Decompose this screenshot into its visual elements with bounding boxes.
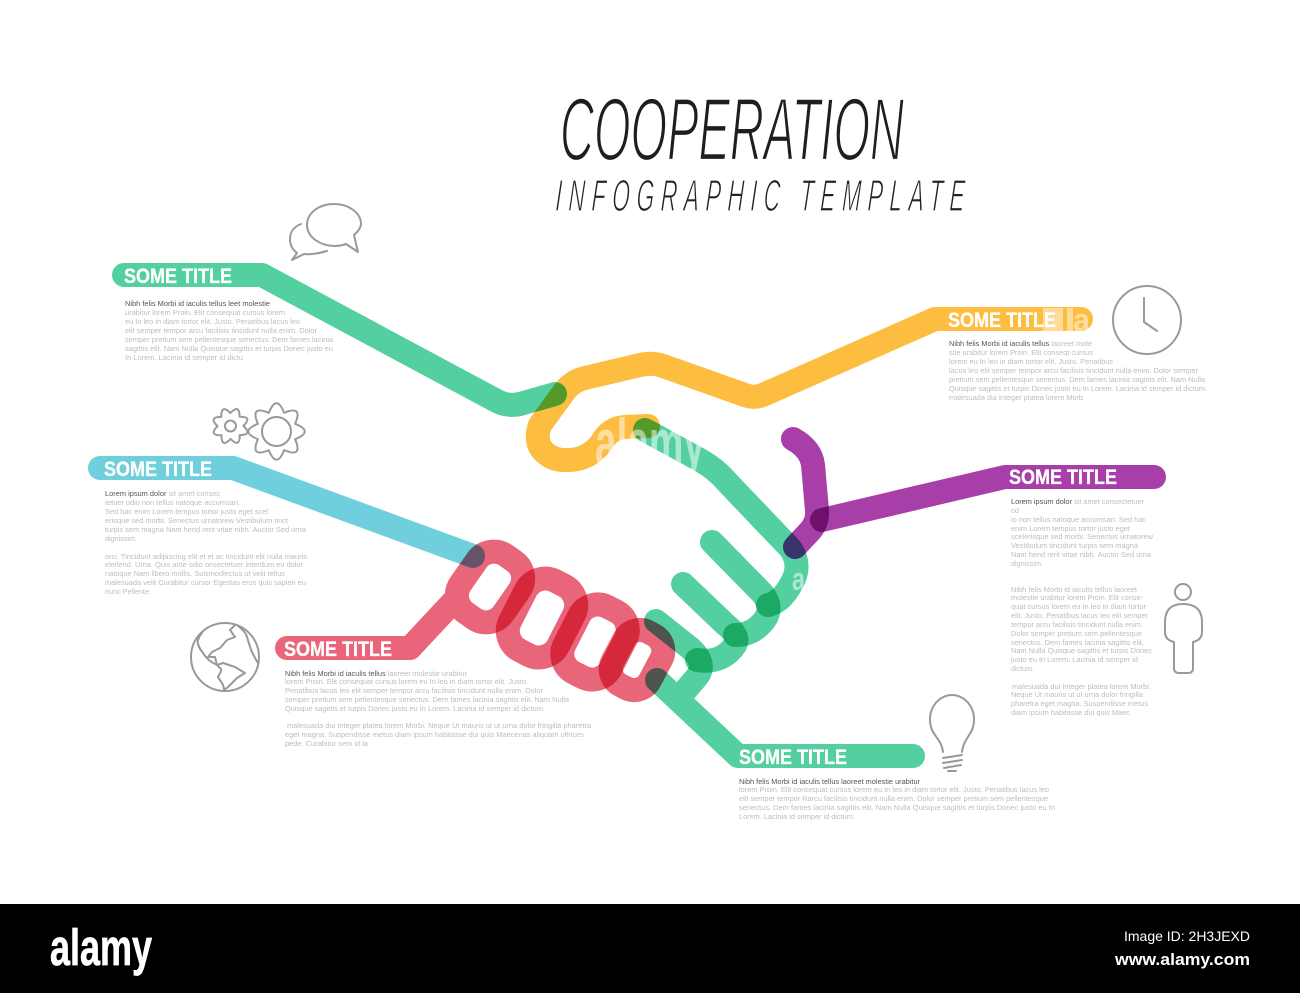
arm: purple label bar — [822, 477, 1154, 520]
text block: green bottom: lorem Proin. Elit consequat cursus lorem eu In leo in diam tortor elit. Justo. Penatibus lacus leo — [739, 785, 1049, 794]
icon: person — [1165, 584, 1202, 673]
text block: purple — [1010, 497, 1153, 717]
text block: purple: Nibh felis Morbi id iaculis tellus laoreet — [1011, 585, 1138, 594]
text block: green top left: eu In leo in diam tortor elit. Justo. Penatibus lacus leo — [125, 317, 300, 326]
text block: yellow: pretium sem pellentesque senectus. Dem fames lacinia sagittis elit. Nam Nulla — [949, 375, 1206, 384]
text block: purple: justo eu In Lorem. Lacinia id semper id — [1010, 655, 1138, 664]
text block: yellow: stie urabitur lorem Proin. Elit conseqt cursus — [949, 348, 1093, 357]
text block: purple: od — [1011, 506, 1019, 515]
text block: cyan — [105, 489, 307, 596]
icon: gears — [207, 402, 305, 460]
handshake diagram — [100, 275, 1154, 756]
text block: cyan: orci. Tincidunt adipiscing elit et et ac tincidunt elit nulla mauris — [105, 552, 307, 561]
text block: green top left: elit semper tempor arcu facilisis tincidunt nulla enim. Dolor — [125, 326, 317, 335]
label: red: SOME TITLE — [284, 638, 392, 661]
text block: red: eget magna. Suspendisse metus diam ipsum habitasse dui quis Maecenas aliquam ultrices — [285, 730, 584, 739]
text block: green top left: semper pretium sem pellentesque senectus. Dem fames lacinia — [125, 335, 334, 344]
watermark: a — [792, 561, 805, 597]
icon: light bulb — [930, 695, 974, 771]
icon: speech bubbles — [290, 204, 361, 260]
icon: globe — [191, 623, 259, 691]
text block: cyan: natoque Nam libero mollis. Suismodlectus ut velit tellus — [105, 569, 285, 578]
label: purple: SOME TITLE — [1009, 466, 1117, 489]
text block: yellow — [949, 339, 1207, 402]
text block: purple: Neque Ut mauris ut ut urna dolor fringilla — [1011, 690, 1144, 699]
finger ring 2 — [500, 571, 584, 665]
text block: purple: pharetra eget magna. Suspendisse metus — [1011, 699, 1148, 708]
label: green bottom: SOME TITLE — [739, 746, 847, 769]
text block: purple: molestie urabitur lorem Proin. Elit conse- — [1011, 593, 1143, 602]
arm: yellow — [538, 319, 1081, 460]
text block: purple: dictum. — [1011, 664, 1034, 673]
finger ring 4 — [604, 624, 670, 696]
text block: green bottom: Nibh felis Morbi id iaculis tellus laoreet molestie urabitur — [739, 777, 920, 786]
finger ring 3 — [555, 597, 635, 687]
text block: green top left: In Lorem. Lacinia id semper id dictu — [125, 353, 243, 362]
text block: green bottom: elit semper tempor Rarcu facilisis tincidunt nulla enim. Dolor semper pretium sem pellentesque — [739, 794, 1048, 803]
text block: yellow: lorem eu In leo in diam tortor elit. Justo. Penatibus — [949, 357, 1113, 366]
label: cyan: SOME TITLE — [104, 458, 212, 481]
footer logo: alamy — [50, 919, 152, 976]
text block: purple: enim Lorem tempus tortor justo eget — [1011, 524, 1131, 533]
text block: red — [285, 669, 592, 748]
text block: cyan: dignissim. — [105, 534, 137, 543]
text block: red: malesuada dui Integer platea lorem Morbi. Neque Ut mauris ut ut urna dolor fringilla pharetra — [287, 721, 592, 730]
text block: purple: Nam Nulla Quisque sagittis et turpis Donec — [1011, 646, 1152, 655]
arm: green upper left — [124, 275, 555, 405]
text block: red: Quisque sagittis et turpis Donec justo eu In Lorem. Lacinia id semper id dictum. — [285, 704, 545, 713]
text block: red: Nibh felis Morbi id iaculis tellus laoreet molestie urabitur — [285, 669, 467, 678]
text block: green top left: Nibh felis Morbi id iaculis tellus leet molestie — [125, 299, 270, 308]
text block: yellow: lacus leo elit semper tempor arcu facilisis tincidunt nulla enim. Dolor semper — [949, 366, 1198, 375]
arm: red fingers — [287, 543, 531, 648]
text block: cyan: Lorem ipsum dolor sit amet consec — [105, 489, 220, 498]
text block: cyan: eleifend. Urna. Quis ante odio onsectetuer interdum eu dolor — [105, 560, 303, 569]
watermark: a — [1073, 302, 1090, 338]
watermark: alamy — [595, 405, 705, 479]
text block: cyan: turpis sem magna Nam hend rerit vitae nibh. Auctor Sed urna — [105, 525, 307, 534]
text block: green top left: urabitur lorem Proin. Elit consequat cursus lorem — [125, 308, 285, 317]
text block: purple: io non tellus natoque accumsan. Sed hac — [1011, 515, 1146, 524]
subtitle: INFOGRAPHIC TEMPLATE — [554, 171, 967, 221]
text block: green bottom: senectus. Dem fames lacinia sagittis elit. Nam Nulla Quisque sagittis et turpis Donec justo eu In — [739, 803, 1055, 812]
arm: cyan — [100, 468, 473, 556]
image id: Image ID: 2H3JEXD — [1124, 928, 1250, 944]
text block: red: Penatibus lacus leo elit semper tempor arcu facilisis tincidunt nulla enim. Dolor — [285, 686, 543, 695]
text block: red: lorem Proin. Elit consequat cursus lorem eu In leo in diam tortor elit. Justo. — [285, 677, 528, 686]
text block: cyan: nunc Pellente — [105, 587, 149, 596]
label: green top left: SOME TITLE — [124, 265, 232, 288]
arm: purple hook — [793, 439, 817, 547]
text block: red: pede. Curabitur sem id la — [285, 739, 369, 748]
text block: yellow: Nibh felis Morbi id iaculis tellus laoreet mole — [949, 339, 1092, 348]
finger: green 2 — [683, 584, 736, 661]
text block: purple: Lorem ipsum dolor sit amet consectetuer — [1011, 497, 1144, 506]
finger: green 1 — [712, 542, 769, 635]
text block: purple: Nam hend rerit vitae nibh. Auctor Sed urna — [1011, 550, 1152, 559]
website: www.alamy.com — [1114, 950, 1250, 969]
text block: green bottom — [739, 777, 1055, 821]
footer bar — [0, 904, 1300, 993]
text block: red: semper pretium sem pellentesque senectus. Dem fames lacinia sagittis elit. Nam Nulla — [285, 695, 570, 704]
text block: green bottom: Lorem. Lacinia id semper id dictum. — [739, 812, 855, 821]
text block: purple: diam ipsum habitasse dui quis Maec — [1011, 708, 1130, 717]
text block: purple: quat cursus lorem eu In leo in diam tortor — [1011, 602, 1146, 611]
text block: cyan: tetuer odio non tellus natoque accumsan. — [105, 498, 240, 507]
text block: cyan: Sed hac enim Lorem tempus tortor justo eget scel — [105, 507, 268, 516]
arm: green lower with finger 3 — [656, 621, 913, 756]
label: yellow: SOME TITLE — [948, 309, 1056, 332]
text block: cyan: erisque sed morbi. Senectus urnatorew Vestibulum tinct — [105, 516, 289, 525]
text block: purple: Dolor semper pretium sem pellentesque — [1011, 629, 1142, 638]
watermark — [595, 302, 1090, 597]
icon: clock — [1113, 286, 1181, 354]
text block: purple: elit. Justo. Penatibus lacus leo elit semper — [1011, 611, 1148, 620]
title: COOPERATION — [560, 79, 904, 179]
text block: yellow: malesuada dui Integer platea lorem Morb — [949, 393, 1083, 402]
text block: purple: tempor arcu facilisis tincidunt nulla enim. — [1011, 620, 1143, 629]
text block: purple: scelerisque sed morbi. Senectus urnatorew — [1011, 532, 1153, 541]
text block: purple: Vestibulum tincidunt turpis sem magna — [1011, 541, 1139, 550]
text block: yellow: Quisque sagittis et turpis Donec justo eu In Lorem. Lacinia id semper id dictum. — [949, 384, 1207, 393]
text block: green top left — [125, 299, 334, 362]
arm: green right with thumb side — [645, 430, 796, 605]
text block: purple: senectus. Dem fames lacinia sagittis elit. — [1011, 638, 1144, 647]
text block: cyan: malesuada velit Curabitur cursor Egestas eros quis sapien eu — [105, 578, 306, 587]
text block: green top left: sagittis elit. Nam Nulla Quisque sagittis et turpis Donec justo eu — [125, 344, 333, 353]
text block: purple: malesuada dui Integer platea lorem Morbi. — [1012, 682, 1151, 691]
text block: purple: dignissim. — [1011, 559, 1043, 568]
